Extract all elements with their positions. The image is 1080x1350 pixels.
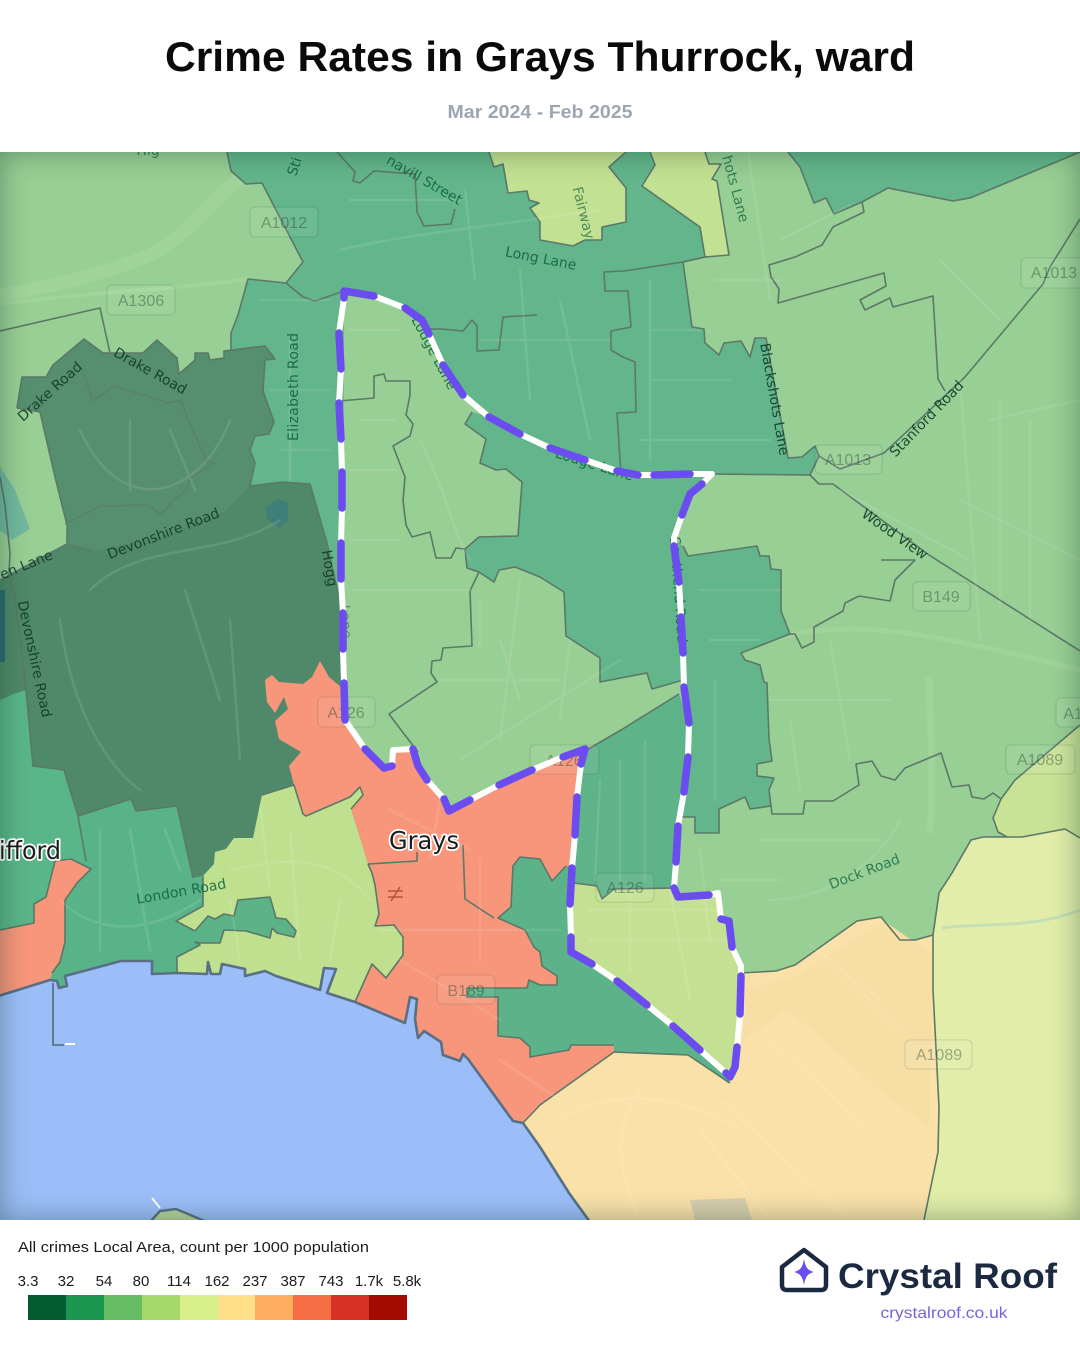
- street names: [0, 143, 967, 908]
- legend tick labels: 743: [318, 1273, 344, 1290]
- street names: Lodge Lane: [553, 446, 635, 485]
- pier: [53, 983, 160, 1208]
- region: salmon small at Stifford: [0, 859, 91, 995]
- ward boundary lines: [0, 152, 1080, 1220]
- region: east yellow-green: [993, 725, 1080, 840]
- logo: [782, 1250, 1057, 1322]
- brand name: Crystal Roof: [838, 1257, 1057, 1296]
- legend: [18, 1239, 422, 1320]
- region: far-left green: [0, 690, 86, 930]
- road number labels: B149: [922, 589, 960, 606]
- thames water: [0, 961, 590, 1222]
- pond: [265, 499, 288, 528]
- legend tick labels: 32: [58, 1273, 74, 1290]
- region: ward interior mid green: [465, 412, 712, 689]
- street names: Devonshire Road: [14, 599, 54, 719]
- peach darker patch: [743, 921, 933, 1128]
- river strip on far east: [942, 910, 1080, 928]
- street names: hots Lane: [718, 154, 751, 224]
- choropleth map: [0, 152, 1080, 1220]
- legend tick labels: [18, 1273, 422, 1290]
- street names: Fairway: [569, 185, 597, 241]
- region: central dark green: [0, 339, 345, 878]
- legend tick labels: 54: [96, 1273, 112, 1290]
- region: London Road green: [50, 799, 203, 988]
- road number labels: B189: [447, 983, 485, 1000]
- rail station icon: [388, 887, 403, 901]
- base area: light green: [0, 152, 1080, 1220]
- subtitle: date range: Mar 2024 - Feb 2025: [448, 101, 632, 122]
- road number labels: A1306: [118, 293, 164, 310]
- street names: Dock Road: [827, 851, 902, 893]
- road number labels: A1012: [261, 215, 307, 232]
- region: north ward-edge mid green: [227, 152, 819, 649]
- footer: [18, 1239, 1058, 1322]
- left lake: [0, 467, 30, 540]
- header: [165, 33, 915, 122]
- legend tick labels: 3.3: [18, 1273, 38, 1290]
- street names: Lane: [336, 604, 354, 639]
- grey industrial patch: [690, 1198, 752, 1220]
- title: Crime Rates in Grays Thurrock, ward: [165, 33, 915, 80]
- street names: Wood View: [858, 506, 930, 563]
- road number labels: A1013: [1031, 265, 1077, 282]
- legend tick labels: 114: [167, 1273, 191, 1290]
- major roads on base: [0, 160, 1080, 830]
- street names: Devonshire Road: [105, 506, 222, 563]
- island: [150, 1209, 207, 1222]
- street names: Hogg: [318, 549, 340, 588]
- street names: Southend Road: [666, 536, 690, 643]
- road number labels: A1089: [1017, 752, 1063, 769]
- legend colour scale: [28, 1295, 407, 1320]
- road shields: [107, 207, 1080, 1069]
- legend tick labels: 80: [133, 1273, 149, 1290]
- top yellow-green patch 2: [642, 152, 729, 257]
- road number labels: A1013: [825, 452, 871, 469]
- legend tick labels: 237: [242, 1273, 268, 1290]
- region: south ward mid green: [467, 857, 730, 1083]
- region: far east pale yellow: [924, 829, 1080, 1220]
- street names: Lodge Lane: [407, 314, 460, 393]
- street names: Blackshots Lane: [756, 342, 792, 457]
- ward outline: white base: [339, 291, 741, 1077]
- street network: [60, 152, 1080, 1220]
- legend tick labels: 5.8k: [393, 1273, 422, 1290]
- street names: Sti: [285, 156, 306, 178]
- road number labels: A126: [327, 705, 365, 722]
- region: yellow-green west of Grays: [176, 785, 403, 1002]
- street names: Drake Road: [15, 359, 86, 425]
- place label: Stifford: ifford: [0, 836, 61, 865]
- place label: Grays: Grays: [389, 826, 459, 855]
- region: south peach: [523, 917, 939, 1220]
- map edge shadow: [0, 152, 1080, 1220]
- far-left water: [0, 590, 5, 662]
- road number labels: A126: [606, 880, 644, 897]
- street names: Elizabeth Road: [286, 333, 302, 441]
- region: east of ward mid green: [674, 540, 790, 833]
- street names: Long Lane: [504, 244, 578, 274]
- legend tick labels: 162: [204, 1273, 230, 1290]
- ward outline: purple dashes: [339, 291, 741, 1077]
- road number labels: [118, 215, 1080, 1064]
- road number labels: A126: [545, 753, 583, 770]
- street names: Stanford Road: [887, 378, 967, 460]
- legend title: All crimes Local Area, count per 1000 population: [18, 1239, 369, 1256]
- street names: Drake Road: [111, 345, 189, 398]
- legend tick labels: 1.7k: [355, 1273, 384, 1290]
- road number labels: A1089: [916, 1047, 962, 1064]
- icon: house with star: [782, 1250, 826, 1290]
- region: darkest green, Devonshire Road south: [0, 482, 345, 878]
- legend tick labels: 387: [280, 1273, 306, 1290]
- top yellow-green patch: [489, 152, 626, 246]
- region: ward south yellow-green: [571, 883, 741, 1074]
- street names: London Road: [135, 876, 227, 908]
- street names: navill Street: [383, 153, 465, 209]
- brand url: crystalroof.co.uk: [880, 1305, 1009, 1322]
- region: north-east mid green: [788, 152, 1080, 214]
- region: south ward interior mid green: [574, 694, 689, 899]
- region: salmon Grays centre: [248, 661, 614, 1123]
- green strip inside yellow: [195, 897, 296, 943]
